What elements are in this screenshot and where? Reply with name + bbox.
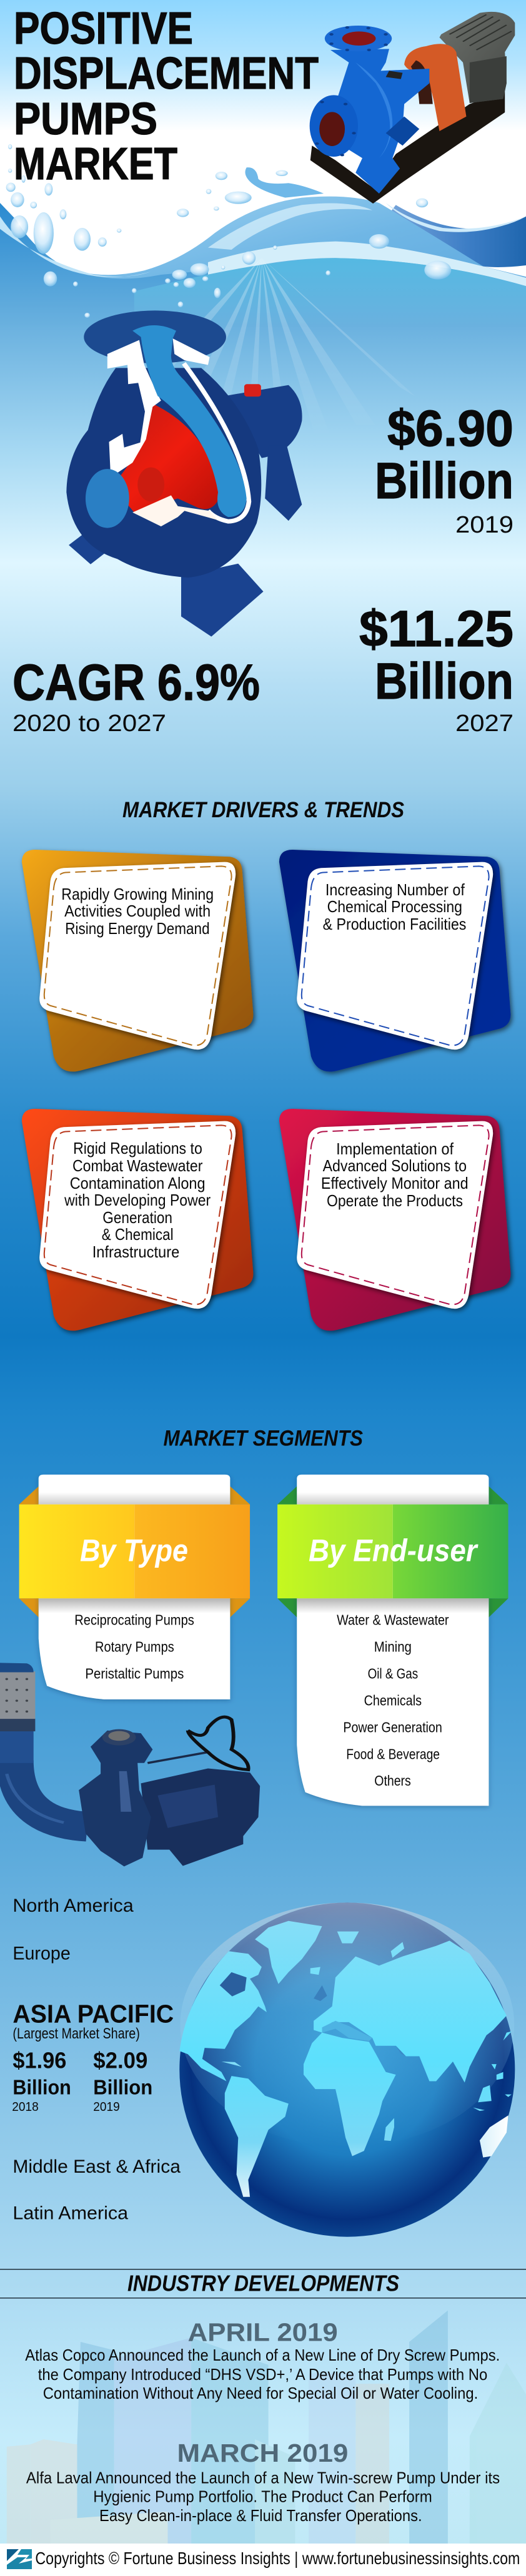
panel: by type: [19, 1475, 250, 1699]
panel: april 2019 development: the Company Introduced “DHS VSD+,’ A Device that Pumps with No: [38, 2365, 487, 2384]
panel: driver card regulations: & Chemical: [102, 1225, 174, 1244]
text: latin america: Latin America: [12, 2203, 128, 2224]
panel: april 2019 development: APRIL 2019: [188, 2318, 338, 2346]
panel: asia pacific: (Largest Market Share): [12, 2025, 140, 2042]
panel: driver card monitoring: Implementation of: [336, 1139, 454, 1158]
panel: driver card regulations: Infrastructure: [92, 1242, 179, 1261]
panel: march 2019 development: [26, 2439, 500, 2525]
title: PUMPS: [14, 94, 157, 144]
footer: [0, 2544, 526, 2576]
panel: by end-user: Oil & Gas: [368, 1666, 418, 1682]
panel: driver card chemical: & Production Facilities: [323, 915, 466, 933]
panel: asia pacific: Billion: [93, 2076, 152, 2099]
panel: driver card regulations: Generation: [102, 1208, 172, 1227]
panel: by end-user: [277, 1475, 509, 1806]
skyline background: [7, 2311, 526, 2544]
stat: CAGR: 2020 to 2027: [12, 710, 166, 737]
icon: cutaway pump with red impeller: [66, 310, 302, 637]
panel: driver card regulations: Rigid Regulations to: [73, 1139, 202, 1158]
panel: driver card mining: Activities Coupled with: [64, 902, 211, 920]
title: POSITIVE: [14, 4, 193, 54]
text: north america: North America: [12, 1895, 134, 1916]
heading: industry developments: INDUSTRY DEVELOPMENTS: [127, 2270, 399, 2296]
panel: april 2019 development: Contamination Without Any Need for Special Oil or Water Cooling.: [43, 2384, 478, 2402]
panel: driver card regulations: [22, 1109, 253, 1330]
panel: asia pacific: 2018: [12, 2100, 39, 2114]
stat: 2019 market size: $6.90: [387, 400, 514, 457]
panel: march 2019 development: MARCH 2019: [177, 2439, 348, 2467]
water wave illustration: [0, 144, 526, 327]
title: MARKET: [14, 139, 177, 189]
panel: april 2019 development: [25, 2318, 500, 2402]
panel: by end-user: Mining: [374, 1639, 412, 1655]
panel: driver card regulations: Combat Wastewater: [72, 1156, 203, 1175]
stat: 2027 market size: [359, 601, 514, 737]
panel: by end-user: Water & Wastewater: [337, 1612, 449, 1628]
stat: CAGR: [12, 654, 260, 737]
panel: driver card regulations: with Developing Power: [64, 1191, 211, 1209]
panel: driver card regulations: Contamination Along: [70, 1174, 206, 1192]
panel: driver card chemical: Increasing Number of: [325, 880, 465, 899]
top sky background: [0, 0, 526, 312]
panel: march 2019 development: Hygienic Pump Portfolio. The Product Can Perform: [93, 2487, 432, 2506]
panel: asia pacific: Billion: [12, 2076, 71, 2099]
panel: asia pacific: ASIA PACIFIC: [12, 2000, 174, 2028]
icon: submersible pump: [0, 1663, 260, 1866]
panel: asia pacific: [12, 2000, 174, 2114]
panel: march 2019 development: Easy Clean-in-place & Fluid Transfer Operations.: [99, 2506, 422, 2525]
panel: by end-user: Food & Beverage: [346, 1746, 440, 1762]
panel: driver card monitoring: Advanced Solutions to: [323, 1156, 467, 1175]
panel: driver card chemical: [279, 850, 510, 1071]
panel: driver card mining: [22, 850, 253, 1071]
heading: market segments: MARKET SEGMENTS: [164, 1426, 363, 1451]
heading: market drivers and trends: MARKET DRIVERS & TRENDS: [122, 798, 404, 822]
light rays: [125, 258, 415, 437]
icon: company logo: [7, 2549, 32, 2569]
panel: driver card mining: Rapidly Growing Mining: [61, 885, 214, 903]
panel: driver card chemical: Chemical Processing: [327, 897, 462, 916]
title: [14, 4, 319, 189]
stat: 2027 market size: 2027: [455, 710, 514, 737]
stat: 2019 market size: 2019: [455, 512, 514, 538]
panel: driver card mining: Rising Energy Demand: [65, 919, 210, 938]
header band lines: [0, 2269, 526, 2270]
panel: asia pacific: 2019: [93, 2100, 120, 2114]
panel: by type: Peristaltic Pumps: [85, 1666, 184, 1682]
panel: driver card monitoring: Operate the Products: [327, 1191, 463, 1210]
panel: march 2019 development: Alfa Laval Announced the Launch of a New Twin-screw Pump Under its: [26, 2468, 500, 2487]
stat: 2027 market size: $11.25: [359, 601, 514, 657]
text: europe: Europe: [12, 1944, 71, 1964]
panel: driver card monitoring: [279, 1109, 510, 1330]
panel: by end-user: Power Generation: [343, 1719, 442, 1735]
panel: by end-user: Chemicals: [364, 1692, 422, 1708]
icon: globe: [179, 1902, 515, 2237]
stat: CAGR: CAGR 6.9%: [12, 654, 260, 711]
title: DISPLACEMENT: [14, 49, 319, 99]
panel: asia pacific: $1.96: [12, 2048, 66, 2073]
panel: by end-user: By End-user: [309, 1533, 479, 1568]
stat: 2019 market size: [375, 400, 514, 538]
text: middle east and africa: Middle East & Africa: [12, 2156, 181, 2177]
panel: by type: By Type: [80, 1533, 188, 1568]
panel: by type: Reciprocating Pumps: [74, 1612, 194, 1628]
panel: driver card monitoring: Effectively Monitor and: [321, 1174, 469, 1192]
icon: blue centrifugal pump with motor: [310, 12, 515, 204]
panel: by type: Rotary Pumps: [95, 1639, 174, 1655]
panel: asia pacific: $2.09: [93, 2048, 147, 2073]
panel: by end-user: Others: [374, 1772, 411, 1789]
